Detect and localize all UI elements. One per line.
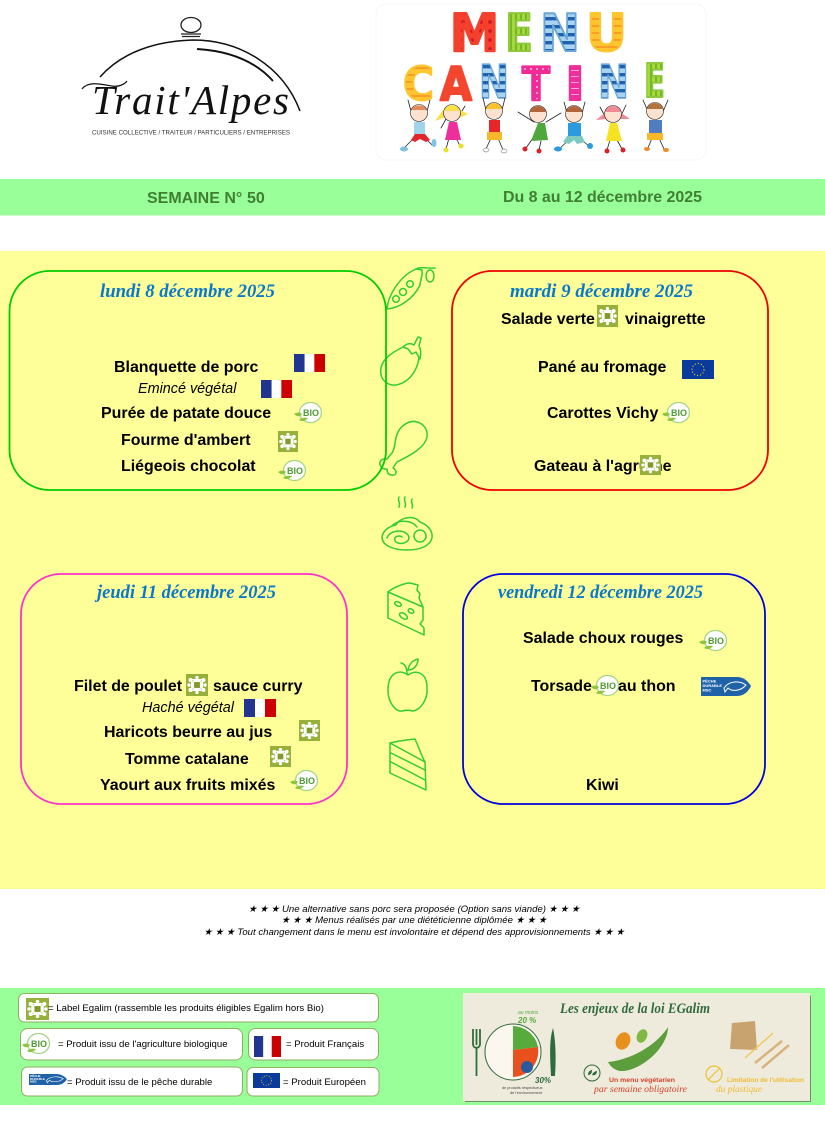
children — [400, 98, 669, 154]
icon: MSC label — [701, 677, 751, 696]
bean graphic: Un menu végétarien — [609, 1077, 675, 1084]
dish: Liégeois chocolat: Liégeois chocolat — [121, 458, 256, 475]
legend item: Egalim — [18, 994, 378, 1022]
dish: Haricots beurre au jus: Haricots beurre au jus — [104, 724, 272, 741]
dish: Purée de patate douce: Purée de patate douce — [101, 405, 271, 422]
menu title letters: M — [450, 4, 499, 64]
dish continuation: sauce curry — [213, 678, 303, 695]
menu title letters: A — [440, 57, 472, 111]
week number: SEMAINE N° — [147, 190, 242, 207]
menu title letters: E — [505, 4, 533, 64]
icon: Egalim label — [186, 674, 208, 696]
icon: Bio label — [699, 630, 726, 650]
dish: Salade verte vinaigrette: Salade verte — [501, 311, 595, 328]
dish: Tomme catalane: Tomme catalane — [125, 751, 249, 768]
week number: 50 — [247, 190, 265, 207]
plate graphic: 30% — [535, 1076, 551, 1085]
legend item: European product: = Produit Européen — [283, 1077, 366, 1088]
icon: pea pod — [387, 268, 435, 309]
dish: Blanquette de porc: Blanquette de porc — [114, 359, 258, 376]
icon: French flag — [244, 699, 276, 717]
icon: Egalim label — [299, 720, 320, 741]
legend item: Bio — [20, 1028, 242, 1060]
icon: Bio label — [290, 770, 318, 790]
dish: Emincé végétal: Emincé végétal — [138, 381, 237, 397]
legend item: French product: = Produit Français — [286, 1039, 364, 1050]
menu title letters: N — [598, 55, 629, 109]
dish: Yaourt aux fruits mixés: Yaourt aux fruits mixés — [100, 777, 276, 794]
icon: Egalim label — [597, 305, 618, 327]
day heading: lundi 8 décembre 2025 — [100, 282, 275, 302]
panel: mardi — [452, 271, 768, 490]
plastic graphic — [706, 1021, 804, 1094]
icon: European flag — [682, 360, 714, 379]
dish: Torsade au thon: Torsade — [531, 678, 592, 695]
dish: Haché végétal: Haché végétal — [142, 700, 235, 716]
plastic graphic: Limitation de l'utilisation — [727, 1078, 804, 1084]
icon: Bio label — [591, 676, 618, 696]
plate graphic: 20 % — [517, 1016, 536, 1025]
menu title letters: N — [479, 55, 509, 109]
day heading: mardi 9 décembre 2025 — [510, 282, 693, 302]
plate graphic: de produits respectueux — [502, 1086, 543, 1090]
icon: chicken leg — [380, 421, 427, 475]
icon: apple — [388, 659, 427, 711]
plate graphic: de l'environnement — [510, 1091, 543, 1095]
legend band — [0, 988, 825, 1105]
plate graphic: au moins — [518, 1010, 539, 1016]
legend item: European product — [247, 1068, 379, 1096]
dish: Kiwi: Kiwi — [586, 777, 619, 794]
panel heading: Les enjeux de la loi EGalim — [559, 1001, 710, 1017]
icon: Bio label — [294, 402, 322, 422]
dish: Gateau à l'agrume: Gateau à l'agrume — [534, 458, 672, 475]
legend item: Egalim: = Label Egalim (rassemble les produits éligibles Egalim hors Bio) — [48, 1003, 324, 1014]
icon: cheese — [388, 583, 424, 635]
footnotes: ★ ★ ★ Menus réalisés par une diététicienne diplômée ★ ★ ★ — [281, 915, 548, 926]
icon: Egalim label — [270, 746, 291, 767]
bean graphic — [584, 1027, 687, 1094]
food icons column — [380, 268, 435, 790]
icon: noodles bowl — [382, 497, 432, 550]
icon: cake slice — [390, 739, 426, 790]
icon: Bio label — [662, 402, 690, 422]
dish: Salade choux rouges: Salade choux rouges — [523, 630, 683, 647]
dish continuation: vinaigrette — [625, 311, 706, 328]
menu title letters: E — [644, 54, 665, 108]
footnotes: ★ ★ ★ Tout changement dans le menu est involontaire et dépend des approvisionnements ★ ★ ★ — [204, 927, 626, 938]
legend item: Bio: = Produit issu de l'agriculture biologique — [58, 1039, 228, 1050]
menu title letters: I — [565, 57, 585, 111]
legend — [18, 994, 379, 1096]
logo: Trait'Alpes: CUISINE COLLECTIVE / TRAITEUR / PARTICULIERS / ENTREPRISES — [92, 130, 290, 136]
icon: Egalim label — [640, 455, 661, 475]
dish: Filet de poulet sauce curry: Filet de poulet — [74, 678, 183, 695]
panel: enjeux de la loi EGalim — [463, 993, 811, 1102]
legend item: sustainable fishing: = Produit issu de le pêche durable — [67, 1077, 212, 1088]
bean graphic: par semaine obligatoire — [593, 1084, 687, 1094]
icon: French flag — [261, 380, 292, 398]
dish: Pané au fromage: Pané au fromage — [538, 359, 667, 376]
date range: Du 8 au 12 décembre 2025 — [503, 189, 702, 206]
panel: vendredi — [463, 574, 765, 804]
plastic graphic: du plastique — [716, 1084, 762, 1094]
panel: jeudi — [21, 574, 347, 804]
menu title letters: C — [403, 57, 434, 111]
footnotes — [204, 904, 626, 938]
week banner — [0, 179, 825, 216]
icon: aubergine — [381, 337, 421, 385]
logo: Trait'Alpes: Trait'Alpes — [92, 77, 289, 123]
logo: Menu Cantine — [376, 4, 706, 160]
menu title letters: U — [586, 4, 627, 64]
icon: French flag — [294, 354, 325, 372]
dish: Carottes Vichy: Carottes Vichy — [547, 405, 658, 422]
dish: Fourme d'ambert: Fourme d'ambert — [121, 432, 251, 449]
plate graphic — [473, 1010, 556, 1095]
day heading: jeudi 11 décembre 2025 — [94, 583, 276, 603]
icon: Bio label — [278, 460, 306, 480]
dish continuation: au thon — [618, 678, 676, 695]
logo: Trait'Alpes — [82, 18, 300, 136]
menu title letters: N — [540, 4, 580, 64]
footnotes: ★ ★ ★ Une alternative sans porc sera proposée (Option sans viande) ★ ★ ★ — [248, 904, 581, 915]
panel: lundi — [10, 271, 386, 490]
menu background — [0, 251, 825, 889]
menu title letters — [403, 4, 665, 111]
day heading: vendredi 12 décembre 2025 — [498, 583, 703, 603]
legend item: French product — [248, 1028, 378, 1060]
icon: Egalim label — [278, 431, 298, 452]
menu title letters: T — [522, 57, 551, 111]
legend item: sustainable fishing — [22, 1067, 242, 1096]
